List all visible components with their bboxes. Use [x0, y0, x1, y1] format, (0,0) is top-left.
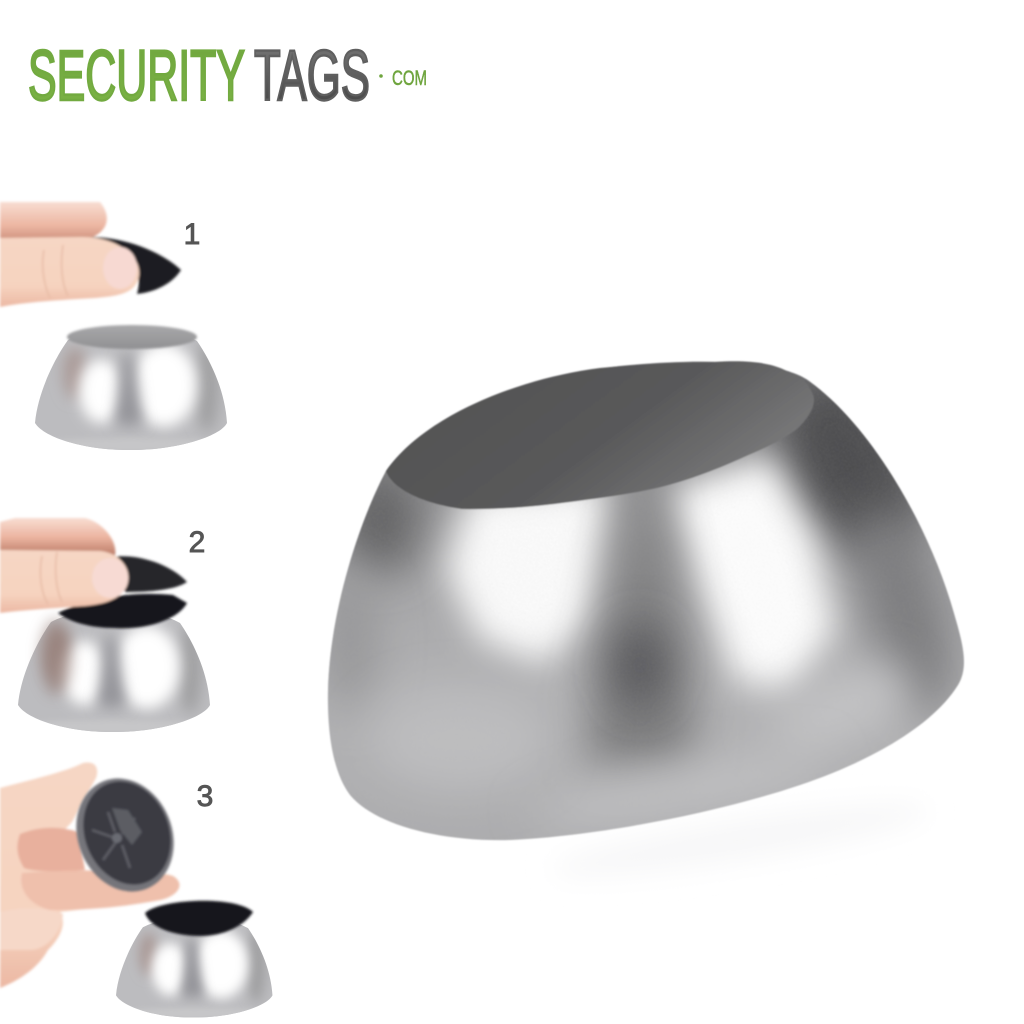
step 3 open cap underside: [60, 764, 190, 906]
step 2 hand lifting cap: [0, 518, 187, 628]
top face: [386, 361, 814, 509]
floor shadow: [549, 791, 931, 889]
logo: SecurityTags.com: TAGS: [254, 37, 370, 116]
step 1 silver dome: [31, 325, 231, 452]
main product: large silver magnetic detacher: [327, 360, 965, 841]
logo: SecurityTags.com: COM: [392, 67, 427, 90]
step 3 silver dome with cap: [113, 901, 276, 1019]
step 3 number: 3: [197, 780, 213, 813]
step 2 number: 2: [189, 526, 205, 559]
step 2 silver dome: [14, 609, 214, 734]
logo: SecurityTags.com: SECURITY: [28, 37, 245, 116]
step 3 hand: [0, 762, 179, 988]
step 1 number: 1: [184, 218, 200, 251]
step 1 hand holding black cap: [0, 202, 181, 307]
